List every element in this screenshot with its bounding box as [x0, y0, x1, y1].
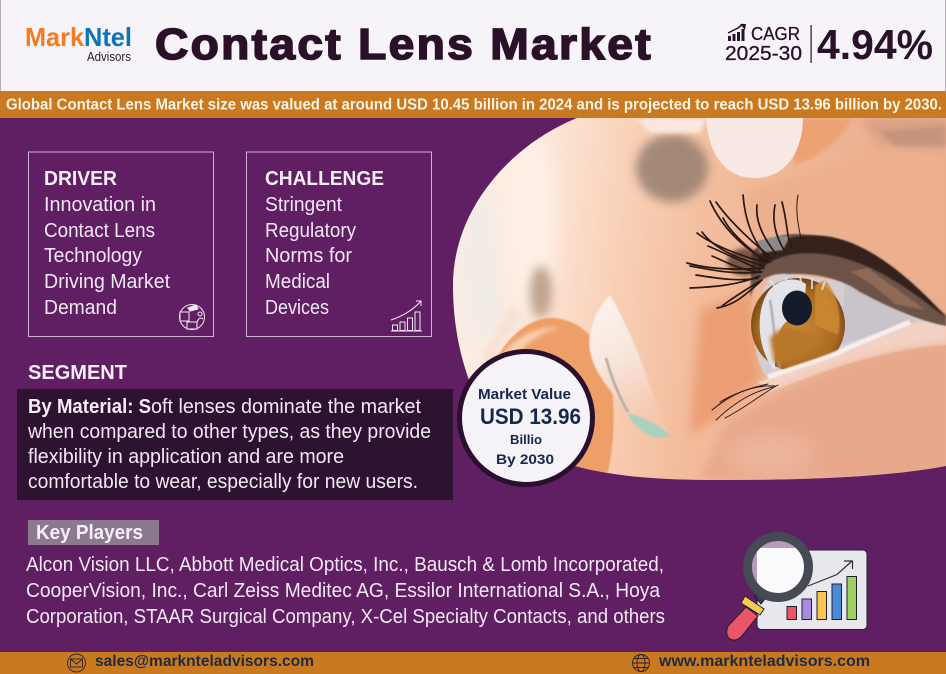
- header band: [0, 0, 946, 92]
- website address: www.marknteladvisors.com: [658, 653, 870, 670]
- iris and reflection: [751, 278, 845, 372]
- driver text: Driving Market: [44, 271, 170, 293]
- driver text: Innovation in: [44, 194, 156, 216]
- brow blur: [636, 134, 708, 202]
- driver heading: DRIVER: [44, 168, 118, 190]
- CAGR period: 2025-30: [725, 43, 802, 65]
- challenge text: Medical: [265, 271, 330, 293]
- key players list: CooperVision, Inc., Carl Zeiss Meditec AG, Essilor International S.A., Hoya: [26, 580, 661, 602]
- pale blurred background on left: [453, 184, 498, 332]
- segment text box: comfortable to wear, especially for new users.: [28, 471, 418, 493]
- driver text: [44, 194, 170, 319]
- upper fingers: [637, 118, 707, 133]
- segment text box: oft lenses dominate the market: [151, 396, 421, 418]
- challenge card: [246, 152, 432, 336]
- challenge text: Regulatory: [265, 220, 356, 242]
- lower finger: [497, 317, 614, 473]
- logo: MarkNtel Advisors: Advisors: [87, 49, 131, 64]
- market value circle: Billio: [510, 433, 542, 447]
- key players list: Corporation, STAAR Surgical Company, X-Cel Specialty Contacts, and others: [26, 606, 665, 628]
- icon: email: [68, 654, 86, 672]
- CAGR value: 4.94%: [817, 21, 933, 68]
- orange summary band: [0, 91, 946, 118]
- icon: growth chart: [728, 24, 746, 41]
- pale blurred fingertip: [486, 315, 510, 360]
- contact lens: [589, 295, 671, 438]
- segment text box: By Material: S: [28, 396, 151, 418]
- under-eye tone: [700, 345, 946, 480]
- icon: global market: [180, 304, 204, 330]
- segment text box: when compared to other types, as they provide: [27, 421, 431, 443]
- challenge text: Stringent: [265, 194, 342, 216]
- market value circle: Market Value: [478, 387, 571, 403]
- segment heading: SEGMENT: [28, 362, 127, 384]
- challenge heading: CHALLENGE: [265, 168, 384, 190]
- driver text: Contact Lens: [44, 220, 155, 242]
- lower lid rim: [758, 322, 946, 392]
- title: Contact Lens Market: [155, 19, 651, 69]
- key players list: Alcon Vision LLC, Abbott Medical Optics, Inc., Bausch & Lomb Incorporated,: [26, 554, 664, 576]
- logo: MarkNtel Advisors: [25, 22, 132, 64]
- fingernail: [706, 118, 803, 178]
- icon: magnifier over bar chart: [727, 536, 867, 640]
- logo: MarkNtel Advisors: Mark: [25, 22, 85, 52]
- market value circle: USD 13.96: [480, 404, 581, 429]
- eyelashes: [687, 195, 802, 420]
- CAGR label: CAGR: [751, 24, 800, 44]
- driver text: Demand: [44, 297, 117, 319]
- footer band: [0, 652, 946, 674]
- driver card: [28, 152, 214, 336]
- market value circle: By 2030: [496, 451, 554, 467]
- segment text box: flexibility in application and are more: [28, 446, 344, 468]
- CAGR block: [725, 21, 933, 68]
- segment text box: [17, 389, 453, 500]
- challenge text: [265, 194, 356, 319]
- icon: rising bars: [391, 301, 422, 331]
- lens: [748, 536, 817, 598]
- photo: eye with contact lens: [450, 118, 946, 483]
- lid crease dark band: [750, 234, 946, 326]
- challenge text: Devices: [265, 297, 329, 319]
- sclera: [754, 272, 946, 380]
- icon: globe: [632, 654, 650, 672]
- key players list: [26, 554, 665, 628]
- email address: sales@marknteladvisors.com: [95, 653, 314, 670]
- logo: MarkNtel Advisors: Ntel: [84, 22, 132, 52]
- upper lid skin: [749, 182, 800, 238]
- market value circle: [460, 352, 592, 484]
- shadow near nose: [690, 290, 760, 435]
- handle: [727, 607, 758, 640]
- bars: [787, 576, 856, 620]
- driver text: Technology: [44, 245, 142, 267]
- challenge text: Norms for: [265, 245, 352, 267]
- key players heading: Key Players: [36, 522, 143, 544]
